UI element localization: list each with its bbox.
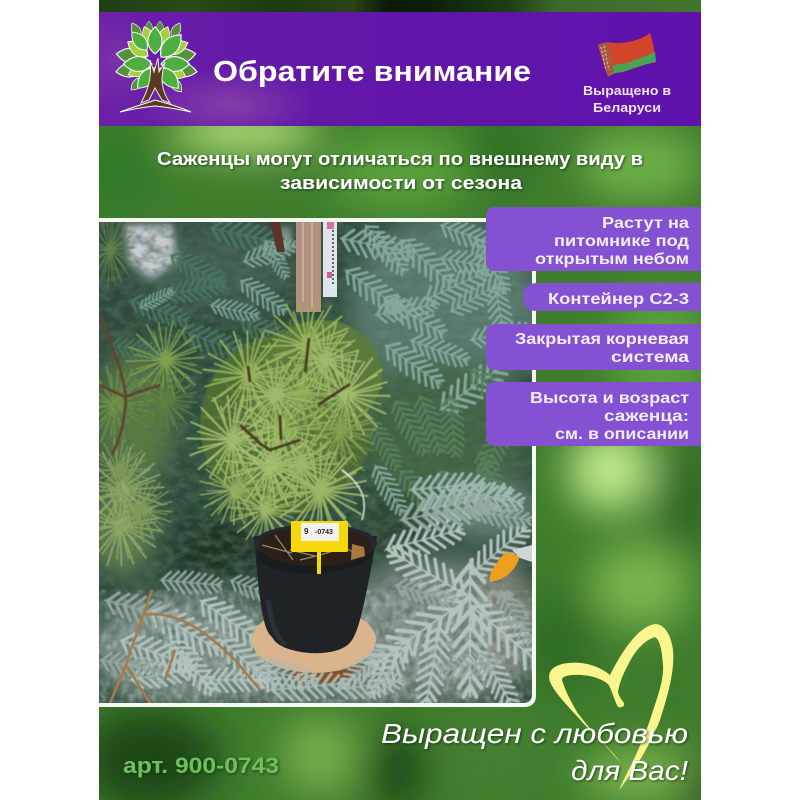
subtitle text: зависимости от сезона [280,173,523,193]
text: grown in Belarus: Выращено в [583,84,671,98]
info pill: container: Контейнер С2-3 [548,291,689,308]
orange pruner [490,545,532,582]
yellow plant label [291,521,348,574]
icon: tree logo [115,21,198,112]
slogan text: для Вас! [571,755,688,786]
text: grown in Belarus: Беларуси [593,101,661,115]
yellow plant label: 9 [304,527,309,536]
info pill: height and age [486,382,701,446]
central pine foliage [184,300,394,550]
info pill: closed root system [486,324,701,370]
slogan text [381,718,688,786]
info pill: container [523,283,701,311]
icon: Belarus flag [598,33,656,77]
wood disc under pot [252,618,376,684]
black plant pot [254,524,377,653]
info pill: open-air nursery [486,207,701,271]
info pill: open-air nursery: Растут на [602,215,689,232]
photo: pine seedling in pot [99,218,536,707]
info pill: closed root system: система [611,349,689,366]
info pill: height and age: см. в описании [555,426,689,443]
info pill: closed root system: Закрытая корневая [515,331,689,348]
info pill: open-air nursery: питомнике под [554,233,689,250]
subtitle text: Саженцы могут отличаться по внешнему виду в [157,149,643,169]
text: grown in Belarus [583,84,671,115]
spruce fronds behind [108,215,533,529]
heading: title: Обратите внимание [213,56,531,88]
blue fir branches on ground [99,491,532,703]
info pill: height and age: саженца: [604,408,689,425]
fir sprigs over disc [250,648,404,702]
background: blurred green foliage [80,0,720,800]
sky patch [124,224,290,280]
dry brown branches [110,590,260,703]
article number: арт. 900-0743 [123,753,279,778]
yellow plant label: -0743 [315,529,333,536]
slogan text: Выращен с любовью [381,718,688,749]
header banner [99,12,701,126]
post and ruler [270,222,337,312]
info pill: open-air nursery: открытым небом [535,251,689,268]
icon: yellow heart [549,624,673,790]
info pill: height and age: Высота и возраст [530,390,689,407]
small pine on left [99,222,206,566]
foliage texture [99,222,532,703]
subtitle text [157,149,643,193]
